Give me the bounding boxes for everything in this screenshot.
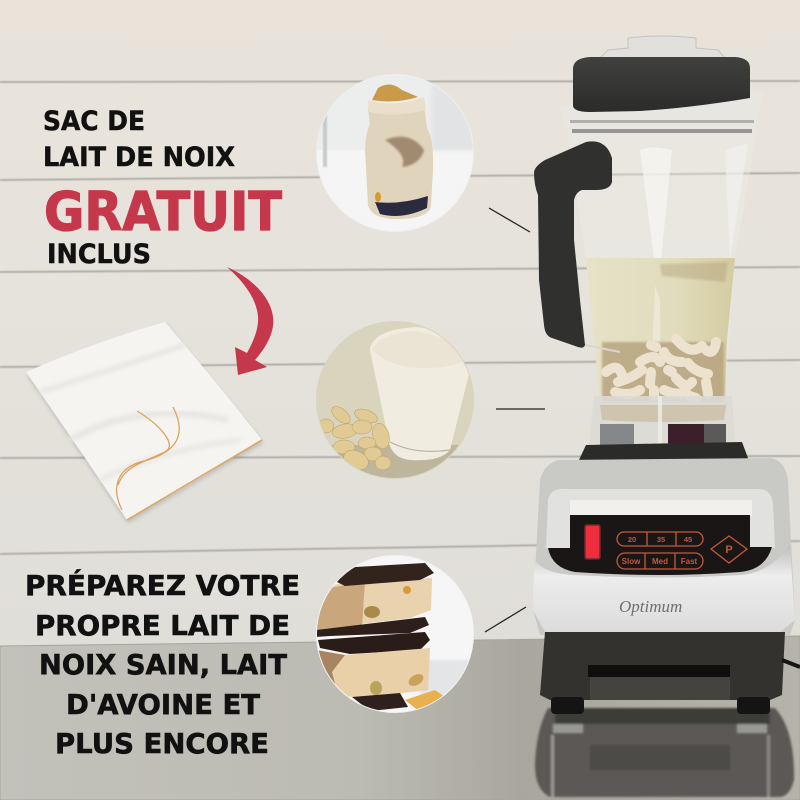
silver front <box>533 545 795 632</box>
blender motor body: P <box>725 544 733 556</box>
heading: make your own milk: NOIX SAIN, LAIT <box>39 649 287 681</box>
blender motor body: 20 <box>628 535 636 544</box>
photo circle: chocolate nut sandwiches <box>316 555 480 715</box>
heading: free nut milk bag: LAIT DE NOIX <box>43 142 235 173</box>
blender jar <box>560 91 763 456</box>
blender lid <box>573 57 750 112</box>
pointer lines <box>485 208 545 632</box>
blender motor body: Med <box>652 557 668 566</box>
blender motor body: 35 <box>657 535 665 544</box>
heading: make your own milk: PRÉPAREZ VOTRE <box>25 568 300 602</box>
countertop <box>0 636 800 800</box>
heading: free nut milk bag: SAC DE <box>43 106 145 137</box>
heading: make your own milk <box>25 568 300 760</box>
buttons <box>617 532 747 569</box>
rim <box>560 91 763 136</box>
blender motor body: Slow <box>622 557 641 566</box>
control panel <box>548 515 772 575</box>
heading: make your own milk: PROPRE LAIT DE <box>35 610 290 642</box>
brand logo: Optimum <box>619 597 682 616</box>
feet <box>551 697 584 714</box>
heading: free nut milk bag <box>43 106 282 270</box>
arrow: curved red arrow to bag <box>227 267 273 375</box>
blender lid cap <box>600 36 725 58</box>
blender reflection <box>535 708 794 797</box>
top trim <box>546 489 775 548</box>
blender base plate <box>578 442 748 478</box>
power switch <box>585 525 600 559</box>
photo: nut milk bag <box>26 322 263 523</box>
white window <box>570 500 752 516</box>
blender motor body: Fast <box>681 557 698 566</box>
blender motor body: 45 <box>684 535 692 544</box>
blender handle <box>534 141 612 348</box>
blender motor body <box>533 458 800 714</box>
jar base <box>588 396 736 456</box>
heading: free nut milk bag: INCLUS <box>47 239 151 270</box>
cashews <box>602 339 724 402</box>
lower black housing <box>540 632 785 700</box>
photo circle: glass of cashew milk <box>316 321 474 480</box>
water <box>586 258 735 402</box>
heading: free nut milk bag: GRATUIT <box>44 180 282 243</box>
photo circle: jar dessert <box>316 74 482 235</box>
heading: make your own milk: D'AVOINE ET <box>66 689 260 721</box>
heading: make your own milk: PLUS ENCORE <box>55 728 269 760</box>
power cord <box>782 660 800 667</box>
